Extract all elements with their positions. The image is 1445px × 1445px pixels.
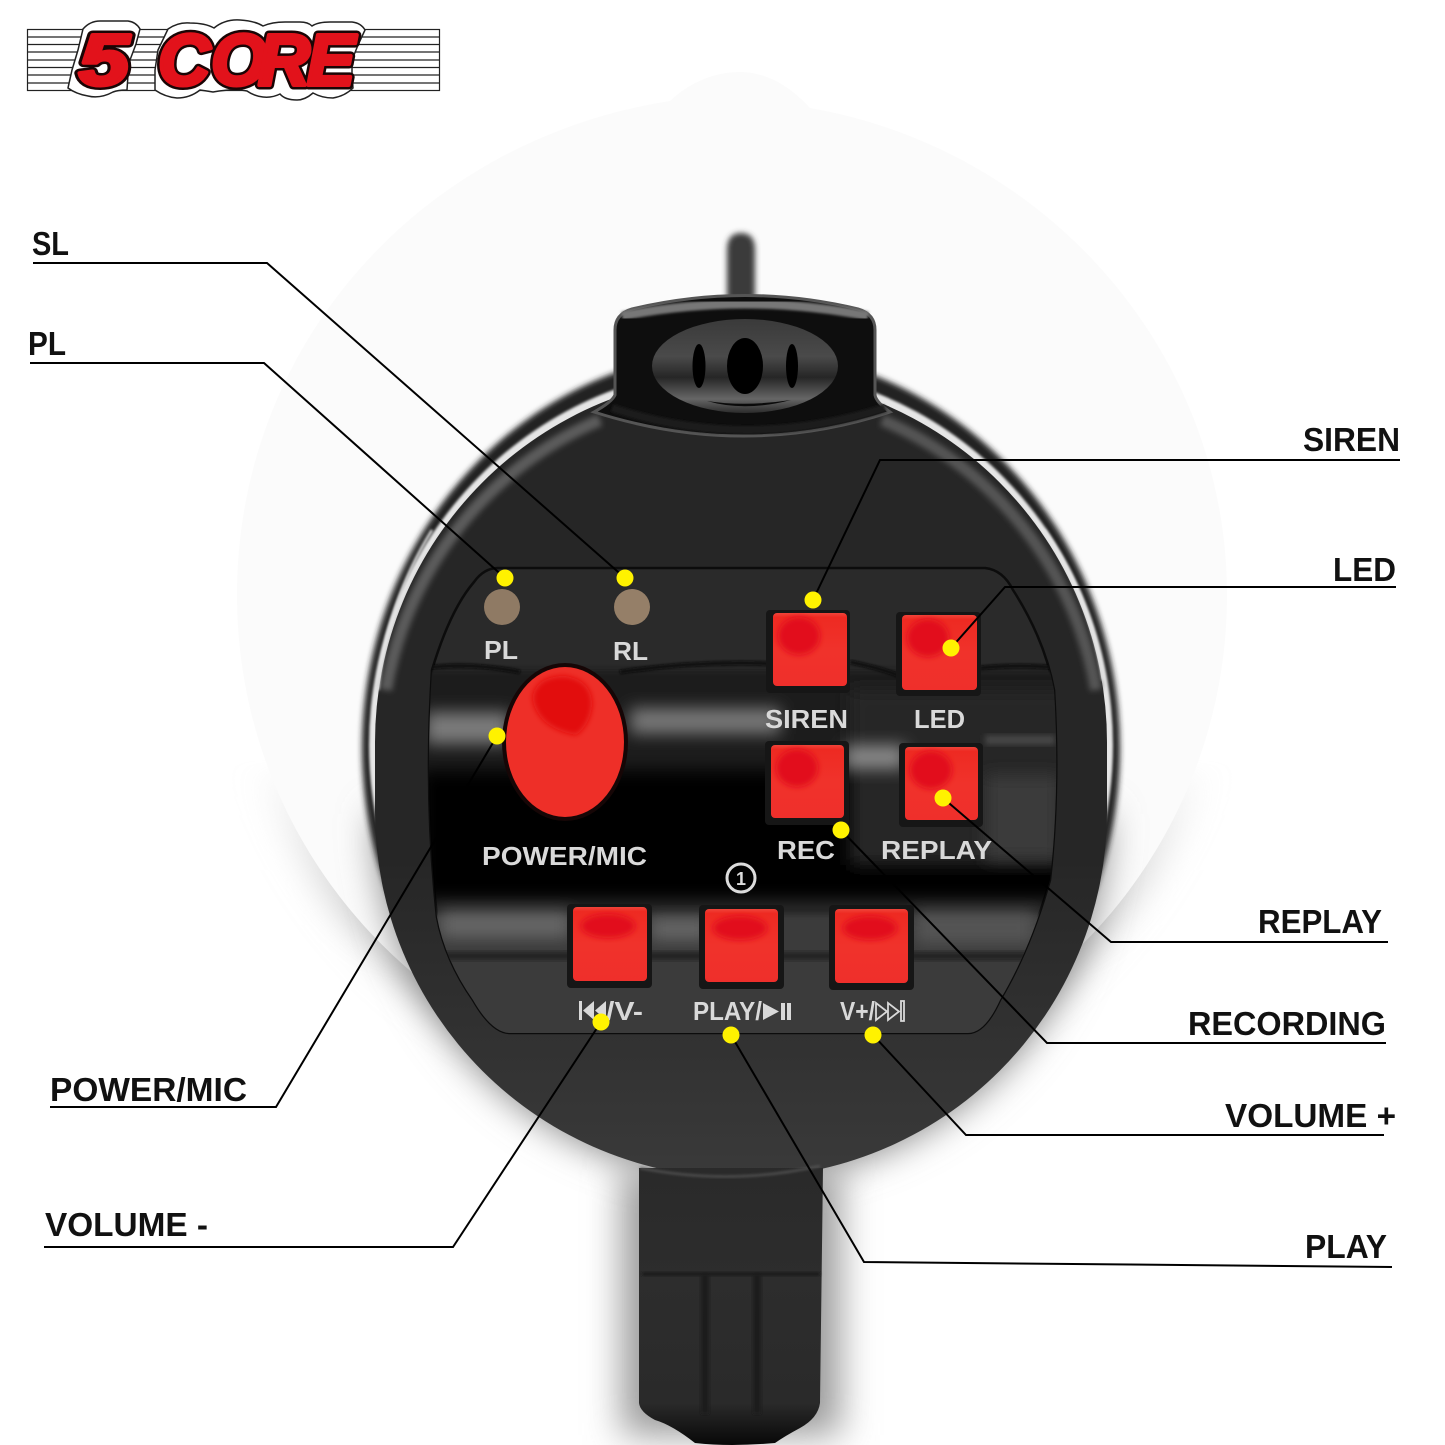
button cap (506, 667, 624, 817)
leader lines (30, 263, 1400, 1267)
lower handle (639, 1166, 823, 1445)
REPLAY: REPLAY (881, 835, 992, 865)
button well (502, 663, 628, 821)
icon: repeat one (727, 864, 755, 892)
button: led (896, 612, 981, 696)
housing shell (594, 296, 890, 436)
face (375, 375, 1107, 1178)
right hole (786, 344, 798, 388)
logo wordmark outline: CORE (158, 21, 357, 101)
RL lamp (614, 589, 650, 625)
label: SL: SL (32, 225, 69, 262)
dot: play (722, 1026, 740, 1044)
dot: SL (616, 570, 634, 586)
dot: replay (934, 790, 952, 806)
lower slot (707, 400, 791, 406)
dot: PL (496, 570, 514, 586)
button: play (699, 905, 784, 989)
power/mic button (502, 663, 628, 821)
microphone grille (652, 319, 838, 413)
dot: volume down (592, 1014, 610, 1030)
logo wordmark outline: 5 (79, 21, 130, 101)
brand logo (27, 20, 440, 101)
red square buttons (567, 610, 983, 990)
button: replay (899, 743, 983, 827)
icon: previous (579, 1001, 606, 1020)
flange highlight (612, 408, 885, 430)
dot: power (488, 728, 506, 744)
PL lamp (484, 589, 520, 625)
logo wordmark fill: CORE (158, 21, 357, 101)
label: REPLAY: REPLAY (1258, 903, 1382, 940)
label: POWER/MIC: POWER/MIC (50, 1071, 247, 1108)
label: RECORDING: RECORDING (1188, 1005, 1386, 1042)
body drop shadow (375, 814, 1107, 1180)
button: volume up (829, 905, 914, 990)
leader: SIREN (813, 460, 1400, 600)
label: SIREN: SIREN (1303, 421, 1400, 458)
shell rim highlight (622, 304, 868, 316)
leader: POWER/MIC (50, 736, 497, 1107)
V-: /V- (606, 996, 643, 1026)
leader: VOLUME + (873, 1035, 1384, 1135)
panel fill (429, 568, 1056, 1033)
light gap between band and bezel (369, 367, 1113, 1123)
icon: repeat one: 1 (736, 869, 746, 889)
PLAY: PLAY/ (693, 996, 762, 1026)
horn shadow (279, 802, 1185, 1022)
panel printed labels (482, 635, 992, 1026)
button: volume down (567, 904, 652, 988)
handle shadow (622, 1170, 840, 1435)
dot: siren (804, 592, 822, 608)
right groove (753, 1274, 761, 1414)
horn disc (237, 72, 1227, 1090)
left groove (701, 1274, 709, 1414)
REC: REC (777, 835, 835, 865)
indicator lamps (484, 589, 650, 625)
V+: V+/ (840, 996, 875, 1026)
leader: PL (30, 363, 505, 578)
leader: PLAY (731, 1035, 1392, 1267)
leader: RECORDING (841, 830, 1386, 1043)
left hole (692, 344, 706, 388)
POWER/MIC: POWER/MIC (482, 841, 647, 871)
label: PLAY: PLAY (1305, 1228, 1387, 1265)
logo stripes (27, 30, 440, 90)
RL: RL (613, 636, 648, 666)
SIREN: SIREN (765, 704, 848, 734)
logo wordmark fill: 5 (79, 21, 130, 101)
button sheen (533, 676, 592, 735)
leader: REPLAY (943, 798, 1388, 942)
leader: VOLUME - (44, 1022, 601, 1247)
logo cloud around 5 (68, 21, 140, 97)
leader: LED (951, 587, 1396, 648)
button: siren (766, 610, 850, 693)
collar line (640, 1166, 820, 1177)
leader: SL (33, 263, 625, 578)
logo cloud around CORE (155, 20, 365, 100)
dot: led (942, 640, 960, 656)
control panel (420, 568, 1070, 1045)
icon: next (876, 1001, 904, 1021)
yellow callout dots (488, 570, 960, 1044)
rear handle loop (727, 233, 755, 300)
label: LED: LED (1333, 551, 1396, 588)
PL: PL (484, 635, 518, 665)
bezel highlight (386, 420, 600, 690)
label: VOLUME -: VOLUME - (45, 1206, 208, 1243)
icon: play pause (763, 1003, 791, 1020)
horizontal seam (642, 1272, 820, 1276)
panel reflections (420, 662, 1070, 1045)
button: rec (765, 741, 849, 825)
megaphone body (362, 350, 1120, 1178)
grip (639, 1168, 823, 1445)
callout labels (28, 225, 1400, 1265)
label: PL: PL (28, 325, 66, 362)
dot: recording (832, 822, 850, 838)
top microphone housing (594, 296, 890, 436)
outer rear band (362, 350, 1120, 1146)
center hole (727, 338, 763, 394)
label: VOLUME +: VOLUME + (1225, 1097, 1396, 1134)
LED: LED (914, 704, 965, 734)
dot: volume up (864, 1026, 882, 1044)
megaphone horn (279, 802, 1185, 1022)
